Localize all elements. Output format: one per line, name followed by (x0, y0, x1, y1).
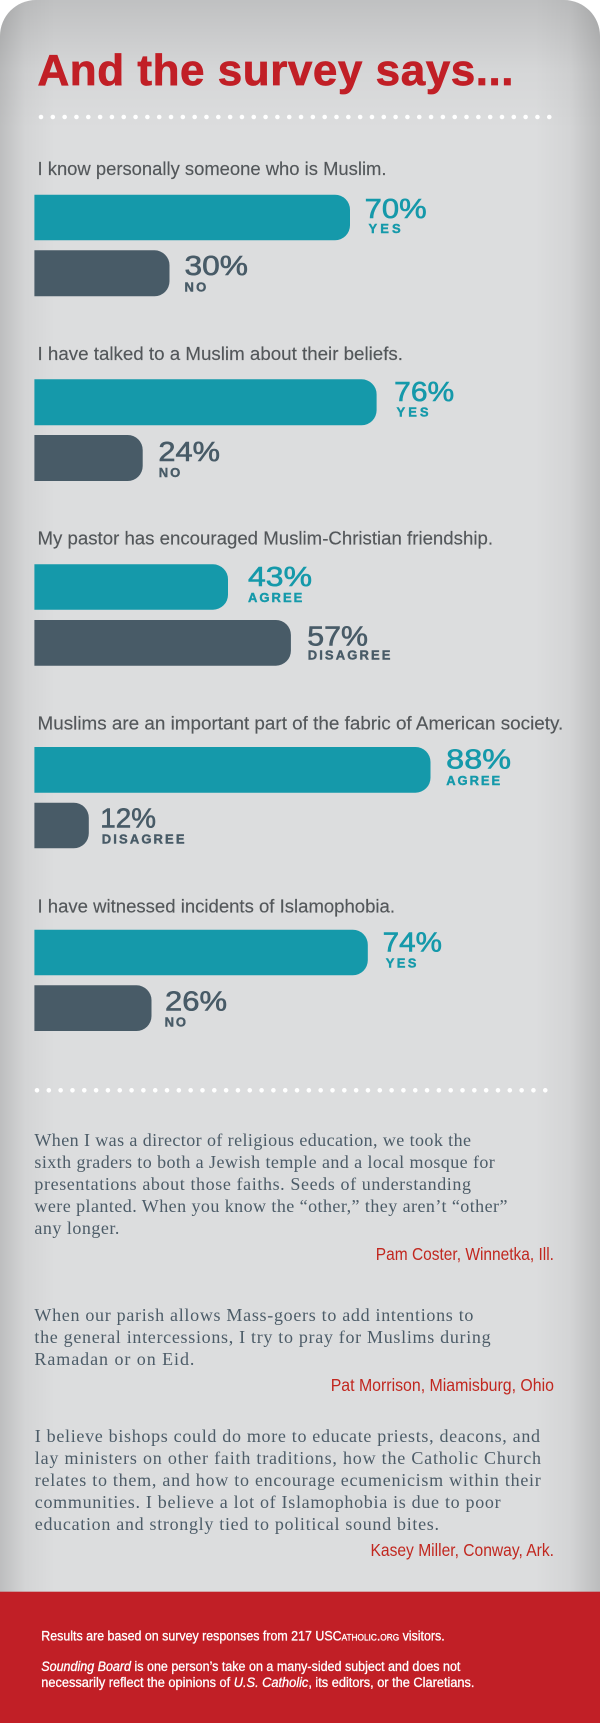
quote 3: communities. I believe a lot of Islamophobia is due to poor (35, 1492, 501, 1512)
attribution 3: Kasey Miller, Conway, Ark. (370, 1540, 554, 1560)
value: 12% disagree: 12% (100, 803, 156, 834)
value: 74% yes: 74% (383, 927, 442, 958)
quote 1 (34, 1130, 554, 1264)
quote 1: presentations about those faiths. Seeds of understanding (34, 1174, 471, 1194)
value: 43% agree: AGREE (248, 590, 303, 605)
question text 4: Muslims are an important part of the fabric of American society. (38, 712, 563, 733)
bar: agree 88% (34, 747, 431, 793)
value: 74% yes: YES (386, 955, 417, 970)
quote 3: I believe bishops could do more to educate priests, deacons, and (35, 1426, 540, 1446)
value: 12% disagree (100, 803, 185, 847)
footer: disclaimer: necessarily reflect the opinions of U.S. Catholic, its editors, or the Claretians. (41, 1675, 475, 1690)
quote 3: education and strongly tied to political sound bites. (35, 1514, 439, 1534)
quote 2: the general intercessions, I try to pray for Muslims during (34, 1327, 491, 1347)
value: 57% disagree: 57% (307, 621, 368, 652)
attribution 1: Pam Coster, Winnetka, Ill. (376, 1244, 554, 1264)
bar: yes 76% (34, 379, 377, 425)
value: 74% yes (383, 927, 442, 970)
bar: agree 43% (34, 564, 228, 610)
value: 70% yes: 70% (365, 193, 427, 224)
bar: yes 74% (34, 930, 368, 975)
attribution 2: Pat Morrison, Miamisburg, Ohio (331, 1375, 554, 1395)
panel: question 3 (34, 527, 493, 666)
quote 3 (35, 1426, 554, 1560)
value: 30% no: NO (184, 279, 206, 294)
panel: question 1 (34, 158, 427, 296)
title: And the survey says... (38, 46, 514, 95)
footer: disclaimer: Sounding Board is one person’s take on a many-sided subject and does not (41, 1659, 461, 1674)
quote 1: any longer. (34, 1218, 119, 1238)
panel: question 4 (34, 712, 563, 848)
question text 2: I have talked to a Muslim about their beliefs. (38, 343, 403, 364)
value: 24% no (158, 436, 220, 480)
bar: no 26% (34, 985, 152, 1031)
bar: yes 70% (34, 195, 350, 240)
quote 2: When our parish allows Mass-goers to add intentions to (34, 1305, 473, 1325)
bar: no 30% (34, 250, 170, 296)
value: 88% agree (446, 743, 511, 788)
value: 30% no: 30% (184, 250, 248, 281)
value: 24% no: 24% (158, 436, 220, 467)
quote 3: lay ministers on other faith traditions, how the Catholic Church (35, 1448, 541, 1468)
value: 76% yes: YES (396, 405, 429, 420)
value: 76% yes: 76% (394, 376, 454, 407)
quote 3: relates to them, and how to encourage ecumenicism within their (35, 1470, 541, 1490)
value: 70% yes: YES (368, 221, 401, 236)
bar: disagree 57% (34, 620, 291, 666)
value: 26% no (165, 985, 227, 1030)
bar: disagree 12% (34, 803, 89, 848)
question text 1: I know personally someone who is Muslim. (38, 158, 386, 179)
panel: question 5 (34, 895, 442, 1031)
value: 30% no (184, 250, 248, 294)
value: 12% disagree: DISAGREE (102, 832, 185, 847)
value: 43% agree (248, 561, 312, 605)
value: 57% disagree (307, 621, 391, 663)
value: 88% agree: 88% (446, 743, 511, 774)
value: 43% agree: 43% (248, 561, 312, 592)
panel: question 2 (34, 343, 454, 481)
footer: survey note: Results are based on survey responses from 217 USCatholic.org visitors. (41, 1629, 445, 1644)
quote 2: Ramadan or on Eid. (34, 1349, 194, 1369)
value: 26% no: NO (165, 1015, 186, 1030)
value: 70% yes (365, 193, 427, 236)
quote 2 (34, 1305, 554, 1395)
value: 76% yes (394, 376, 454, 420)
value: 57% disagree: DISAGREE (308, 648, 391, 663)
quote 1: were planted. When you know the “other,” they aren’t “other” (34, 1196, 508, 1216)
value: 24% no: NO (159, 465, 180, 480)
quote 1: sixth graders to both a Jewish temple and a local mosque for (34, 1152, 495, 1172)
question text 5: I have witnessed incidents of Islamophobia. (38, 895, 395, 916)
value: 88% agree: AGREE (446, 773, 501, 788)
footer: disclaimer (41, 1659, 475, 1690)
footer band (0, 1592, 600, 1723)
bar: no 24% (34, 435, 143, 481)
quote 1: When I was a director of religious education, we took the (34, 1130, 471, 1150)
value: 26% no: 26% (165, 985, 227, 1016)
question text 3: My pastor has encouraged Muslim-Christian friendship. (38, 527, 493, 548)
